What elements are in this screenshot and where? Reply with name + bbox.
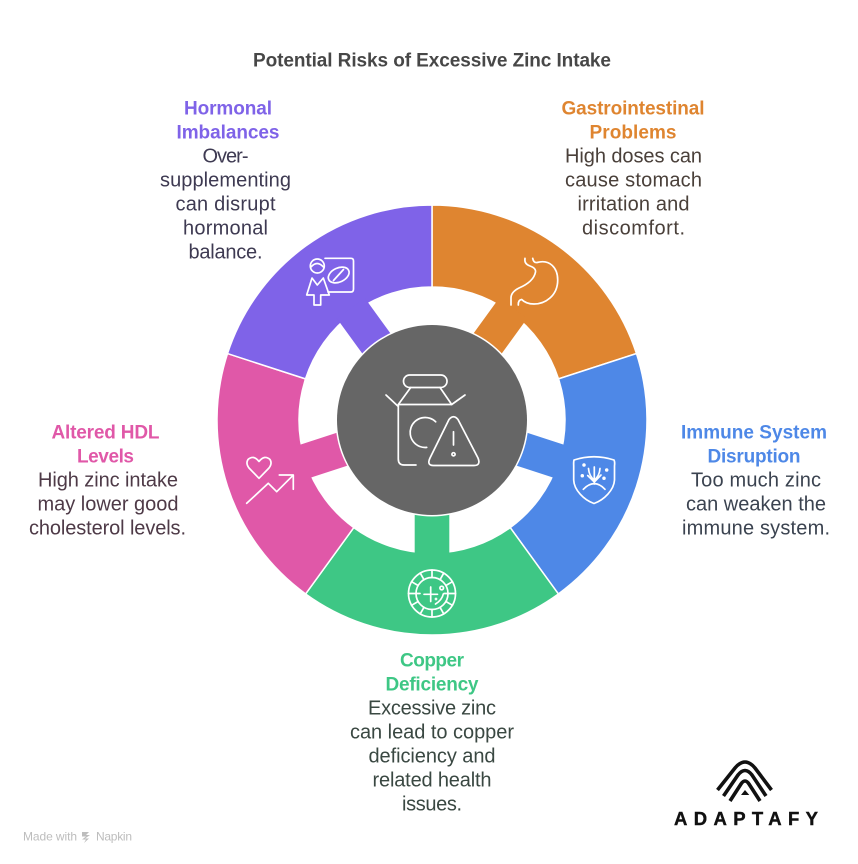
center hub: [336, 324, 528, 516]
text block: hormonal imbalances: Hormonal: [184, 99, 272, 120]
text block: altered HDL levels: High zinc intake: [38, 470, 178, 492]
text block: altered HDL levels: [29, 423, 186, 540]
text block: copper deficiency: Excessive zinc: [368, 698, 496, 720]
text block: copper deficiency: can lead to copper: [350, 722, 514, 744]
icon: immune shield with tree: [574, 457, 615, 504]
panel: altered HDL segment: [217, 354, 354, 594]
text block: hormonal imbalances: can disrupt: [176, 194, 276, 216]
text block: immune system disruption: immune system.: [682, 518, 830, 540]
text block: immune system disruption: Immune System: [681, 423, 827, 444]
logo: Adaptafy: ADAPTAFY: [674, 808, 819, 829]
text block: copper deficiency: deficiency and: [368, 746, 496, 768]
title: Potential Risks of Excessive Zinc Intake: [253, 51, 611, 72]
icon: supplement bottle with warning triangle: [386, 375, 479, 466]
panel: gastrointestinal segment: [432, 205, 636, 379]
icon: stomach: [511, 258, 558, 305]
text block: copper deficiency: related health: [372, 770, 492, 792]
text block: gastrointestinal problems: [562, 99, 704, 240]
text block: altered HDL levels: Altered HDL: [52, 423, 160, 444]
text block: hormonal imbalances: supplementing: [160, 170, 291, 192]
footer: made with Napkin: [23, 830, 132, 844]
logo: Adaptafy: [674, 762, 819, 829]
text block: altered HDL levels: may lower good: [38, 494, 178, 516]
text block: gastrointestinal problems: Problems: [590, 123, 676, 144]
text block: gastrointestinal problems: discomfort.: [582, 218, 685, 240]
text block: hormonal imbalances: Over-: [202, 146, 248, 168]
text block: gastrointestinal problems: cause stomach: [565, 170, 702, 192]
text block: hormonal imbalances: balance.: [188, 242, 262, 264]
text block: copper deficiency: [350, 651, 514, 816]
text block: immune system disruption: can weaken the: [686, 494, 826, 516]
panel: hormonal imbalances segment: [228, 205, 432, 379]
text block: immune system disruption: Too much zinc: [691, 470, 821, 492]
text block: gastrointestinal problems: High doses can: [565, 146, 702, 168]
footer: made with Napkin: Napkin: [96, 830, 132, 844]
text block: hormonal imbalances: hormonal: [183, 218, 268, 240]
text block: altered HDL levels: cholesterol levels.: [29, 518, 186, 540]
text block: copper deficiency: Deficiency: [386, 675, 479, 696]
text block: immune system disruption: Disruption: [708, 447, 800, 468]
text block: immune system disruption: [681, 423, 830, 540]
icon: person with hormone pill board: [307, 258, 354, 305]
panel: immune system segment: [510, 354, 647, 594]
text block: gastrointestinal problems: Gastrointestinal: [562, 99, 704, 120]
text block: hormonal imbalances: [160, 99, 291, 264]
text block: gastrointestinal problems: irritation and: [578, 194, 690, 216]
text block: hormonal imbalances: Imbalances: [176, 123, 280, 144]
icon: heart and rising arrow: [247, 457, 293, 503]
text block: copper deficiency: issues.: [402, 794, 462, 816]
icon: copper wheel: [408, 570, 456, 617]
footer: made with Napkin: Made with: [23, 830, 77, 844]
text block: copper deficiency: Copper: [400, 651, 465, 672]
panel: copper deficiency segment: [306, 508, 558, 635]
text block: altered HDL levels: Levels: [77, 447, 134, 468]
